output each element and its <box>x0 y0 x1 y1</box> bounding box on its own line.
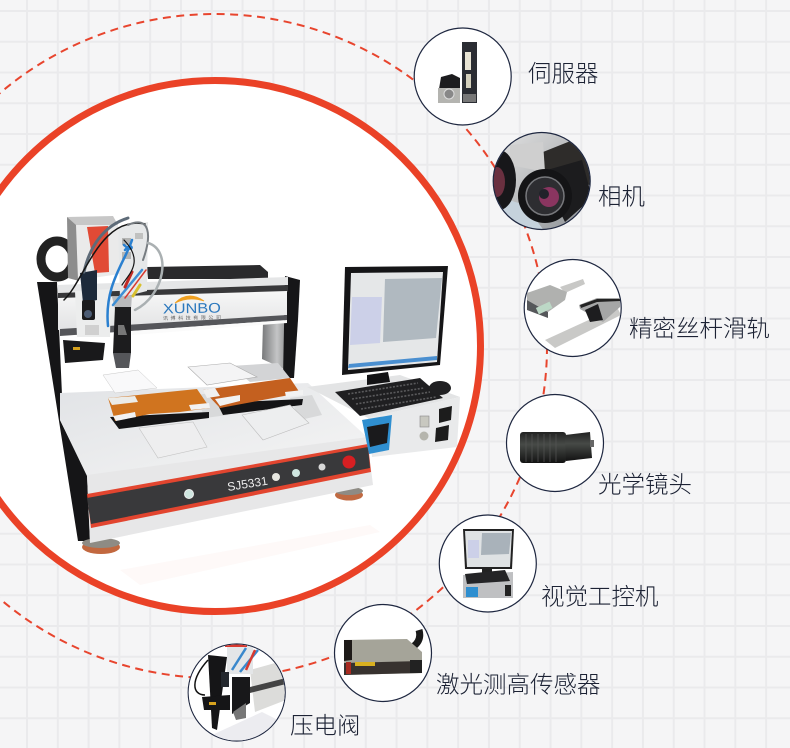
left fixture <box>103 370 228 458</box>
item: laser height sensor <box>334 604 600 702</box>
icon: camera lenses <box>494 133 590 229</box>
icon: long lens <box>520 432 594 463</box>
ring <box>493 132 590 230</box>
label: 相机 <box>598 184 645 210</box>
label: 伺服器 <box>528 60 598 86</box>
item: optical lens <box>506 394 692 498</box>
icon: small workstation <box>463 529 514 598</box>
icon: dispensing head close-up <box>188 644 286 745</box>
cable loop <box>41 241 73 277</box>
monitor <box>342 266 448 385</box>
front panel <box>87 437 373 543</box>
label: 激光测高传感器 <box>436 672 600 698</box>
right gantry post <box>262 276 300 378</box>
item: servo <box>414 28 598 125</box>
item: piezo valve <box>188 644 360 745</box>
label: 压电阀 <box>290 712 360 738</box>
item: vision PC <box>439 515 658 612</box>
control cabinet <box>307 375 460 457</box>
dispensing machine illustration <box>37 216 460 585</box>
hoses <box>64 218 162 326</box>
cable chain <box>147 265 268 279</box>
left gantry post and side <box>37 282 90 541</box>
machine feet <box>82 487 363 554</box>
icon: linear guide <box>527 279 621 348</box>
icon: servo drive and motor <box>438 42 477 103</box>
table top surface <box>60 383 367 476</box>
panel buttons <box>184 456 356 498</box>
gantry beam <box>57 277 288 336</box>
camera assembly <box>63 270 111 363</box>
company logo: XUNBO <box>163 299 221 316</box>
label: 视觉工控机 <box>541 584 658 610</box>
main circle panel <box>0 80 480 612</box>
model number: SJ5331 <box>226 474 269 494</box>
right fixture <box>188 363 322 440</box>
label: 光学镜头 <box>598 472 692 498</box>
keyboard and mouse <box>335 378 451 416</box>
icon: sensor <box>344 630 422 675</box>
label: 精密丝杆滑轨 <box>629 316 770 342</box>
company logo <box>163 296 221 322</box>
company logo: 讯博科技有限公司 <box>163 314 221 322</box>
floor reflection <box>120 525 380 585</box>
item: linear rail <box>524 260 770 356</box>
head housing <box>67 216 148 298</box>
item: camera <box>482 132 645 232</box>
dashed orbit ring <box>0 14 547 678</box>
valve <box>112 295 132 368</box>
